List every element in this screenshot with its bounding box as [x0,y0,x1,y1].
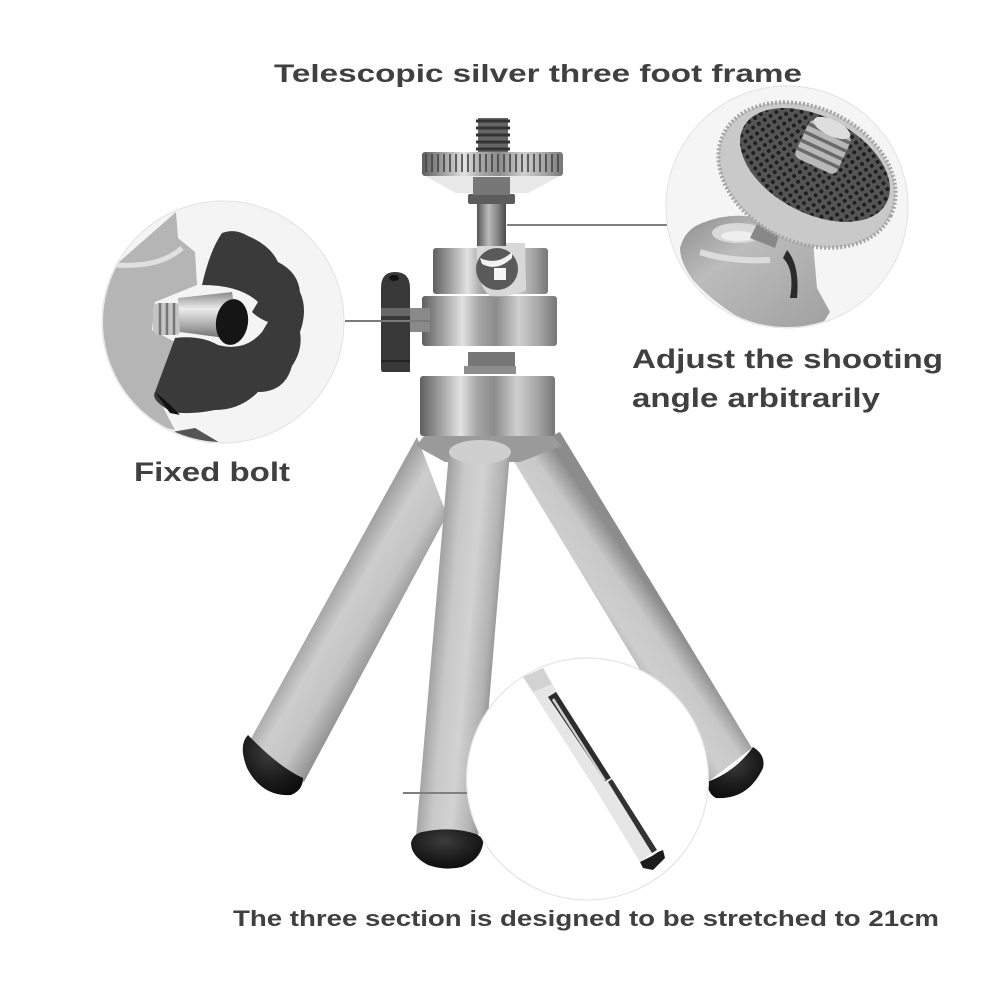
plate mesh [740,108,890,222]
label: adjust angle: angle arbitrarily [632,383,880,413]
housing [680,216,830,328]
rod dark inner [548,692,611,781]
stem and slot [750,224,778,248]
mounting plate [422,152,563,195]
leg sockets [416,436,562,462]
label: fixed bolt: Fixed bolt [134,457,290,487]
leader line: leg [403,792,467,794]
black knob [154,231,304,413]
lower cylinder [420,352,555,436]
label: adjust angle [632,344,943,413]
left leg [243,437,447,795]
right leg [510,432,764,798]
label: stretch length: The three section is designed to be stretched to 21cm [233,906,939,931]
plate rim [716,100,898,250]
screw [476,118,510,152]
thread screw [795,116,851,174]
barrel opening [216,299,248,345]
stem [468,194,515,246]
tripod [243,118,764,869]
detail circle: mounting plate [666,74,920,328]
rod end cap [640,850,665,870]
metal thread [153,303,181,335]
post background [98,212,197,430]
rod body [523,668,656,862]
ball head socket [433,243,548,296]
locking bolt [381,272,430,372]
leader line: bolt [345,320,430,322]
leader line: mount [507,224,668,226]
center leg [411,440,511,869]
title: telescopic frame: Telescopic silver three foot frame [274,60,802,88]
label: adjust angle: Adjust the shooting [632,344,943,374]
ball head ring [422,296,557,346]
detail circle: telescoping section [466,658,708,900]
metal barrel [178,292,234,338]
detail circle: fixed bolt [98,201,344,446]
